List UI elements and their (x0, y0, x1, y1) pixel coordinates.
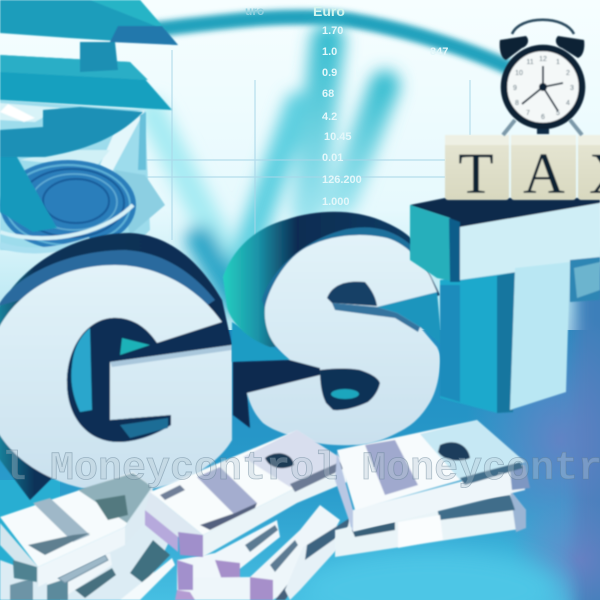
G rim (0, 233, 232, 500)
gap between G and S (232, 322, 290, 362)
rupee top bar (0, 0, 178, 45)
clock handle (512, 20, 574, 34)
money bundle right (335, 420, 530, 532)
bundle left top (0, 472, 152, 567)
bundle left side (0, 523, 38, 585)
clock numerals: 12 (539, 56, 547, 63)
currency table: 10.45 (324, 131, 352, 143)
S upper notch (327, 282, 377, 306)
rupee middle bar (0, 55, 172, 110)
clock numerals: 2 (566, 70, 570, 77)
rupee bowl (0, 107, 143, 157)
bundle 4 (285, 517, 353, 600)
clock numerals: 5 (556, 110, 560, 117)
grid lines (115, 50, 470, 260)
GST letter S (223, 212, 442, 445)
GST letter T (410, 198, 600, 413)
T stem side (440, 272, 515, 413)
T top edge (410, 198, 600, 227)
clock numerals: 4 (566, 100, 570, 107)
money stacks lower left (0, 500, 175, 600)
banknote behind the rupee (0, 100, 165, 250)
currency table: 126.200 (322, 174, 362, 186)
money bundle right lower (335, 490, 526, 557)
currency table: Euro (313, 3, 345, 19)
clock body (504, 48, 582, 126)
block A (511, 135, 576, 206)
S lower notch (320, 368, 380, 410)
TAX blocks (445, 135, 600, 206)
rupee symbol (0, 0, 178, 232)
currency table (245, 3, 448, 208)
S rim (223, 212, 440, 347)
money bundles lower center (175, 505, 353, 600)
currency table: 68 (322, 88, 334, 100)
block X (578, 135, 600, 206)
S right wedge (377, 292, 442, 345)
currency table: 4.2 (322, 111, 337, 123)
clock hands (522, 66, 563, 111)
currency table: 1.000 (322, 196, 350, 208)
S face (247, 235, 441, 445)
currency table: uro (245, 4, 264, 18)
clock numerals: 1 (556, 59, 560, 66)
T dark under bar (570, 257, 600, 302)
bundle center top (150, 430, 347, 535)
currency table: 847 (430, 46, 448, 58)
clock legs (503, 120, 582, 135)
alarm clock (500, 20, 584, 135)
clock numerals: 9 (513, 85, 517, 92)
currency table: 1.0 (322, 46, 337, 58)
clock numerals: 10 (515, 70, 523, 77)
block T (445, 135, 509, 206)
clock numerals (513, 56, 574, 121)
money bundle left (0, 472, 158, 587)
clock bells (500, 36, 528, 60)
bundle 3 (177, 505, 340, 600)
currency table: 1.70 (322, 25, 343, 37)
currency table: 0.9 (322, 67, 337, 79)
rupee leg (0, 157, 57, 232)
bundle 2 (177, 520, 280, 590)
currency table: 0.01 (322, 152, 343, 164)
G hole (67, 318, 232, 442)
T cross bar face (460, 203, 600, 280)
T side (410, 205, 457, 282)
T stem face (510, 262, 570, 410)
chart lines (152, 40, 385, 300)
money bundle center (145, 430, 347, 557)
clock numerals: 11 (526, 59, 534, 66)
S lower shadow block (233, 360, 320, 428)
money roll (0, 160, 136, 250)
clock numerals: 3 (570, 85, 574, 92)
clock numerals: 6 (541, 114, 545, 121)
block T: T (458, 141, 494, 206)
S rim inner band (262, 227, 420, 310)
clock numerals: 8 (515, 100, 519, 107)
block A: A (523, 141, 565, 206)
rupee connector (80, 42, 118, 72)
GST letter G (0, 233, 232, 500)
bundle right top (337, 420, 525, 510)
clock numerals: 7 (526, 110, 530, 117)
G face (0, 265, 232, 492)
chart wave (150, 17, 510, 68)
